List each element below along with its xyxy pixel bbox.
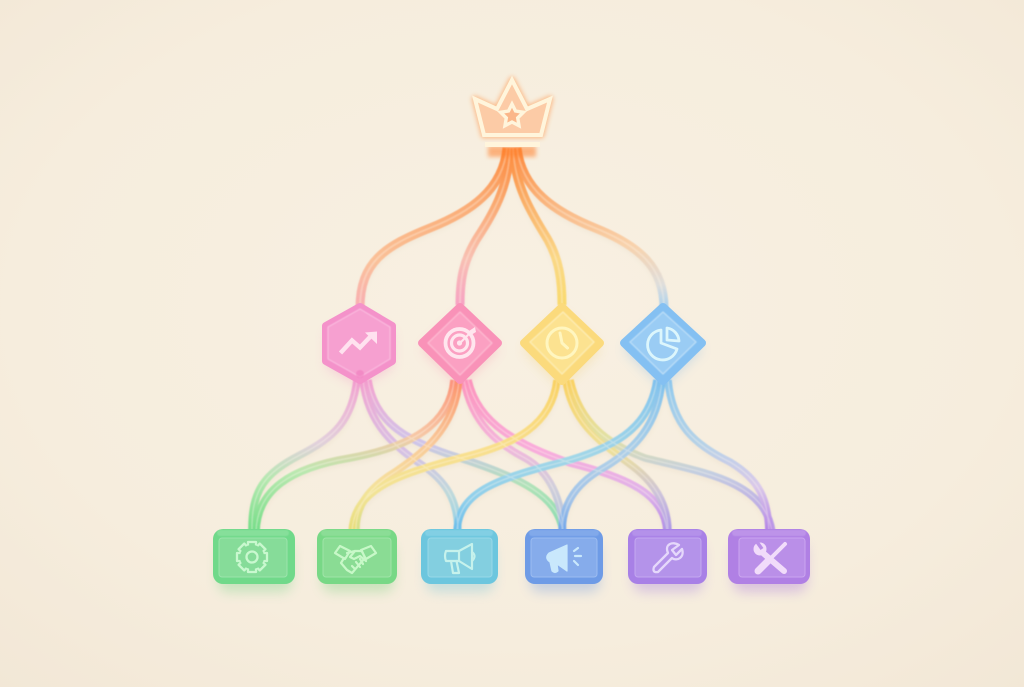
node: pie chart diamond [624, 307, 702, 387]
tubes: second tier to bottom tier [252, 380, 772, 532]
tube highlights: lower [252, 380, 772, 532]
icon: handshake [335, 546, 376, 573]
box: partnership handshake [317, 529, 397, 592]
icon: gear [237, 542, 267, 572]
icon: megaphone outline [445, 544, 474, 573]
tube highlights: upper [360, 148, 664, 308]
box: settings gear [213, 529, 295, 592]
box: outline wrench [628, 529, 707, 592]
icon: pie chart [648, 328, 679, 360]
icon: wrench outline [654, 543, 683, 572]
box: solid megaphone [525, 529, 603, 592]
icon: wrench and screwdriver [754, 542, 785, 571]
node: clock diamond [524, 307, 600, 387]
tubes: crown to second tier [360, 148, 664, 308]
icon: clock [547, 328, 577, 358]
node: target diamond [422, 307, 498, 387]
icon: rising arrow [340, 332, 377, 353]
tube shadows [252, 151, 772, 535]
box: outline megaphone [421, 529, 498, 592]
node: growth hexagon [326, 307, 392, 386]
box: crossed tools [728, 529, 810, 592]
icon: target [446, 327, 476, 357]
icon: crown [475, 80, 550, 157]
icon: megaphone solid [547, 545, 581, 572]
